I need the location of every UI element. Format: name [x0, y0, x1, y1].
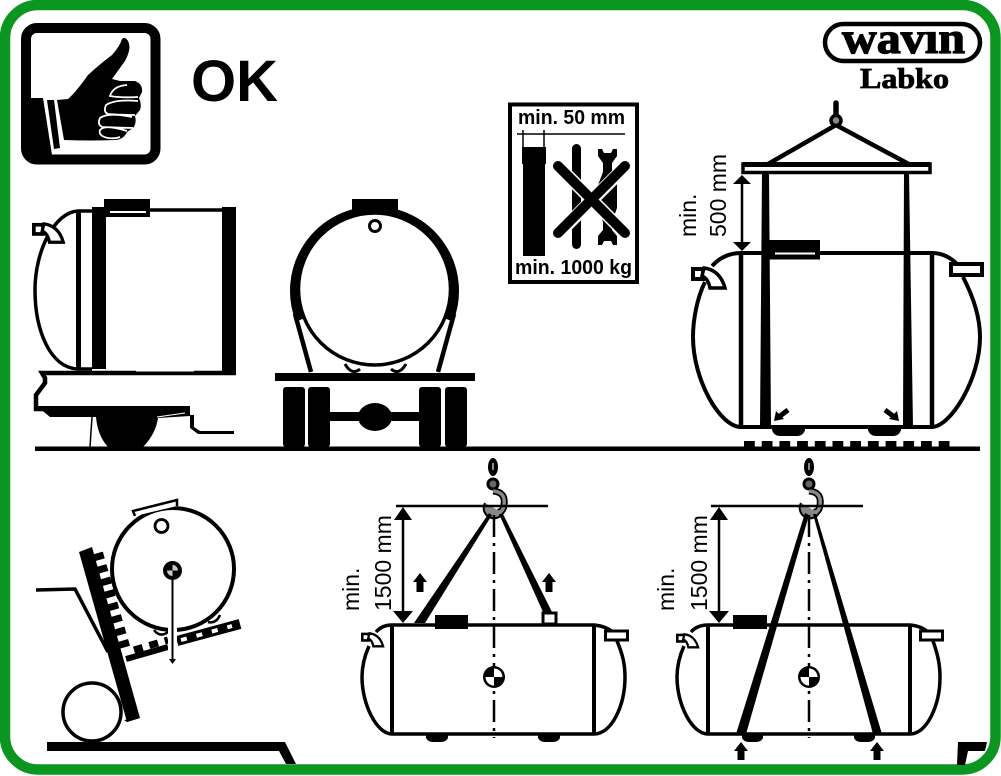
- arrows onto feet: [780, 410, 893, 416]
- blocks: [744, 441, 950, 448]
- logo: Wavin Labko: [825, 14, 980, 95]
- centre line: [493, 515, 495, 738]
- dimension 1500 mm: min.: [653, 568, 679, 611]
- logo: Wavin Labko: Labko: [860, 63, 949, 95]
- icon: thumbs up: [26, 28, 156, 160]
- dimension 1500 mm: [653, 507, 729, 623]
- trolley back: [79, 547, 140, 722]
- shelf: [126, 624, 240, 659]
- logo: Wavin Labko: wavin: [842, 14, 965, 63]
- heading: OK: OK: [191, 49, 278, 114]
- centre of gravity arrow: [163, 561, 182, 664]
- slings: [736, 513, 882, 734]
- tank on hand trolley: [36, 500, 296, 764]
- panel: sling specification card: [510, 104, 637, 282]
- lifting with two point slings: [338, 458, 628, 742]
- hook: [484, 458, 504, 518]
- tank: [362, 615, 628, 742]
- lifting with sling under tank: [653, 458, 942, 760]
- centre of gravity: [483, 666, 505, 688]
- tank: [693, 240, 982, 436]
- truck chassis: [36, 373, 236, 409]
- trolley wheel: [63, 683, 121, 741]
- dimension 1500 mm: 1500 mm: [686, 515, 712, 611]
- tank side: [34, 199, 236, 372]
- ramp: [47, 742, 296, 764]
- ground line: [35, 446, 980, 451]
- tank: [677, 615, 942, 742]
- lift arrows: [413, 573, 556, 592]
- dimension 500 mm: 500 mm: [705, 154, 731, 237]
- dimension 500 mm: min.: [675, 194, 701, 237]
- slings: [414, 513, 552, 623]
- lift arrows: [734, 742, 884, 760]
- back pad blocks: [98, 553, 126, 650]
- centre of gravity: [798, 666, 820, 688]
- dimension 1500 mm: 1500 mm: [370, 515, 396, 611]
- tank: [112, 508, 234, 630]
- lifting height line: [396, 505, 548, 507]
- lifting height line: [711, 505, 863, 507]
- lifting with spreader beam: [675, 103, 982, 444]
- dimension 1500 mm: min.: [338, 568, 364, 611]
- dimension 500 mm: [675, 154, 751, 251]
- dimension 1500 mm: [338, 507, 413, 623]
- spreader beam and slings: [761, 125, 916, 168]
- trolley handle: [36, 589, 108, 652]
- centre line: [808, 515, 810, 738]
- hook: [800, 458, 820, 518]
- cut-off shape in corner: [957, 742, 987, 765]
- label: min. 1000 kg: min. 1000 kg: [515, 257, 632, 279]
- label: min. 50 mm: min. 50 mm: [518, 107, 625, 129]
- truck rear view: [275, 199, 475, 447]
- truck side view: [34, 199, 236, 447]
